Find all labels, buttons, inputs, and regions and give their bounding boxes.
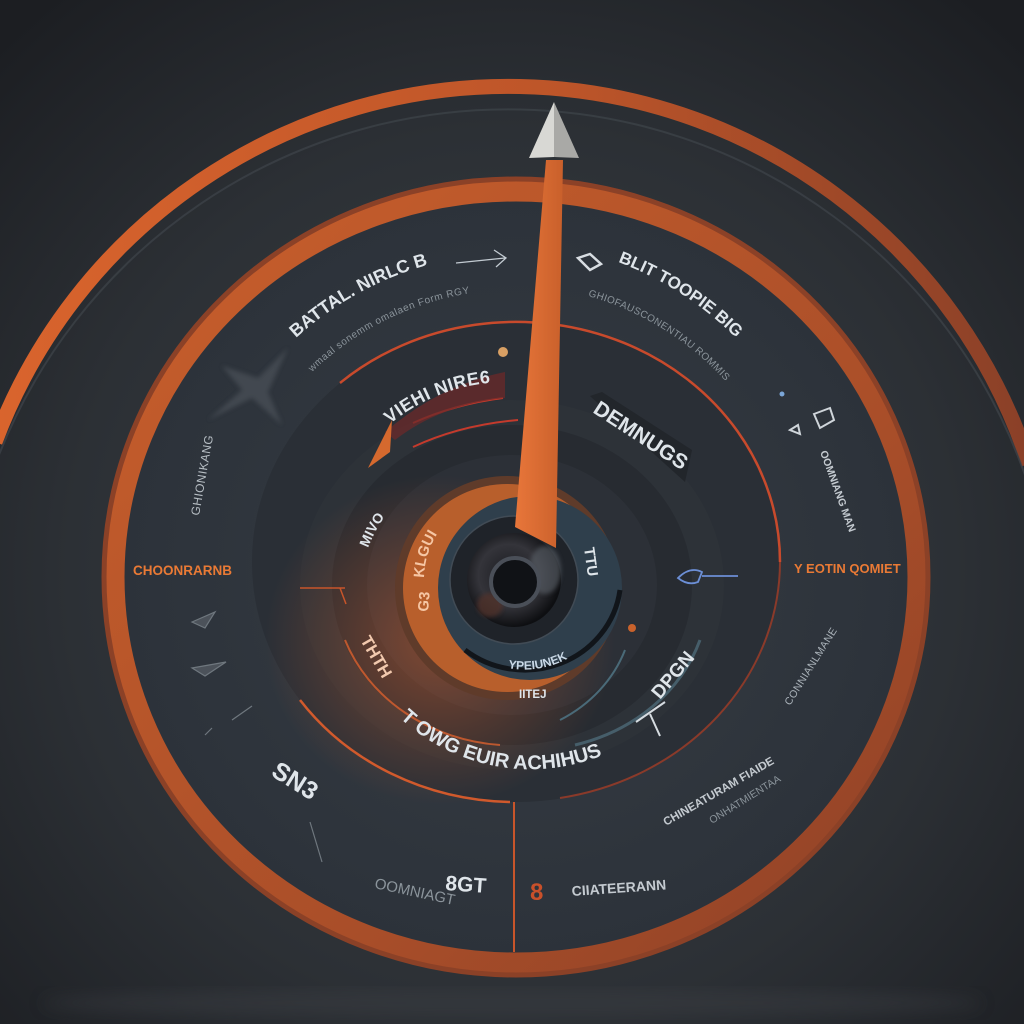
inner dial red edge top — [340, 322, 780, 562]
specks lower left — [192, 612, 322, 862]
text: bottom center number: 8GT — [445, 872, 487, 898]
text: left orange label: CHOONRARNB — [133, 563, 232, 578]
arrow: top left — [456, 250, 506, 267]
icon: right upper glyph — [790, 408, 834, 434]
icon: orange eight: 8 — [530, 879, 543, 906]
inner top right label: DEMNUGS — [589, 397, 692, 475]
outer orange ring — [0, 86, 1024, 464]
text: hub orange: KLGUI — [414, 530, 437, 577]
text: inner lower right: DPGN — [648, 648, 699, 703]
text: inner top left — [382, 370, 505, 440]
text: hub slate label: YPEIUNEK — [509, 652, 568, 670]
text: right lower rotated: CONNIANLMANE — [782, 625, 840, 708]
text: inner left: MIVO — [359, 513, 383, 548]
text: under hub: IITEJ — [519, 689, 546, 701]
text: lower right second line: ONHATMIENTAA — [707, 773, 783, 827]
inner arcs — [413, 398, 503, 423]
orange ring outer — [395, 476, 619, 700]
text: hub orange number: G3 — [415, 591, 434, 612]
text: top left sub: wmaal sonemm omalaen Form RGY — [308, 286, 468, 371]
text: right upper vertical: OOMNIANG MAN — [817, 449, 858, 534]
floor reflection — [42, 989, 982, 1017]
icon: top right glyph — [578, 254, 601, 270]
hub knob — [467, 533, 561, 627]
outer ring inner shadow line — [0, 109, 1024, 487]
text: inner lower left: THTH — [357, 632, 396, 681]
icon: lower right ticks — [636, 702, 665, 736]
panel: main dial disc — [104, 179, 928, 975]
icon: blue mark right — [678, 570, 738, 583]
text: inner bottom heading: T OWG EUIR ACHIHUS — [403, 708, 601, 770]
arrowhead — [529, 102, 579, 158]
text: bottom right: CIIATEERANN — [571, 876, 667, 899]
text: hub right: TTU — [580, 546, 601, 577]
divider line bottom — [513, 800, 515, 952]
text: top right sub: GHIOFAUSCONENTIAU ROMMIS — [589, 290, 730, 380]
icon: orange triangle — [368, 420, 392, 468]
slate disc — [438, 496, 622, 680]
main dial orange ring — [114, 191, 918, 963]
inner dial red edge bottom — [560, 562, 780, 798]
inner heading: VIEHI NIRE6 — [382, 370, 490, 422]
text: bottom center: OOMNIAGT — [373, 875, 457, 909]
orange glow — [265, 475, 615, 805]
needle shaft — [515, 160, 563, 548]
text: top right heading: BLIT TOOPIE BIG — [619, 251, 742, 336]
star icon left — [208, 348, 288, 425]
text: inner top right — [589, 392, 692, 482]
text: right orange label: Y EOTIN QOMIET — [794, 561, 901, 576]
inner dial bottom left orange edge — [300, 700, 510, 802]
arrowhead right face — [554, 102, 579, 158]
text: top left heading: BATTAL. NIRLC B — [288, 254, 426, 338]
panel: inner hub rings — [395, 476, 622, 700]
orange ring — [403, 484, 611, 692]
text: lower right rotated block: CHINEATURAM FIAIDE — [662, 755, 777, 829]
text: bottom left: SN3 — [267, 756, 323, 806]
line: inner left marker — [300, 588, 346, 604]
text: left vertical: GHIONIKANG — [188, 434, 216, 517]
dot — [498, 347, 508, 357]
icon: small orange marks — [628, 624, 636, 632]
main ring highlight — [104, 179, 928, 975]
dot — [780, 392, 784, 396]
dark ring — [450, 516, 578, 644]
panel: inner dial — [252, 322, 780, 805]
